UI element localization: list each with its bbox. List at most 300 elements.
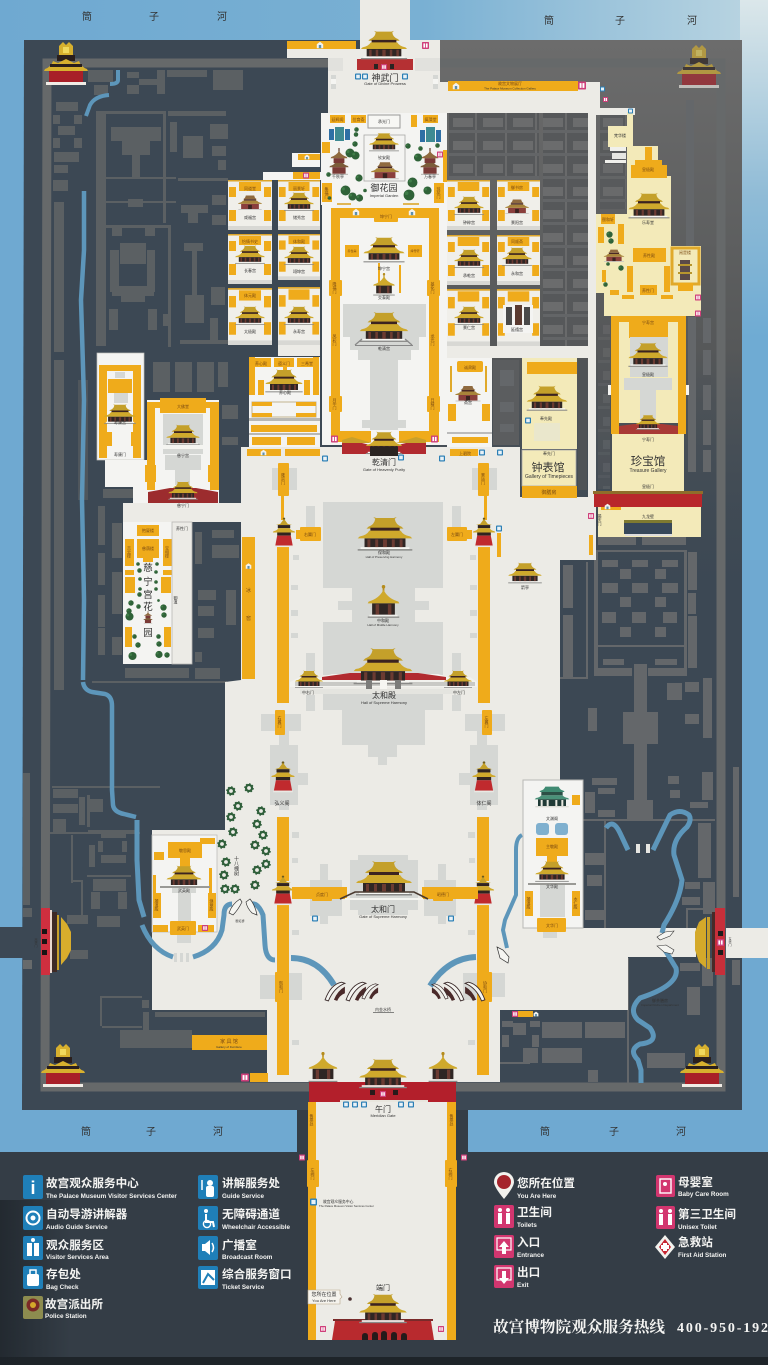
Ningshou yellow frame [611, 316, 619, 434]
panel: Imperial Garden: 集福门 [324, 186, 330, 200]
panel: Cining Palace: 大佛堂 [177, 403, 189, 409]
side halls: 弘德殿 [347, 310, 357, 315]
Hall of Central Harmony: 中和殿 [377, 617, 389, 623]
legend item: Police Station: 故宫派出所 [45, 1297, 103, 1311]
Qin'an Hall [369, 133, 399, 151]
Duanhong bridge: 断虹桥 [235, 918, 245, 923]
garden vertical title: 宫 [143, 589, 153, 601]
panel: Wenhua Hall: 文华殿 [546, 883, 558, 889]
cell: 永寿宫 [278, 287, 320, 345]
cell: 咸福宫: 咸福宫 [244, 214, 256, 220]
legend item: Broadcast Room [198, 1236, 273, 1261]
Hall of Joyful Longevity [628, 193, 670, 218]
legend item: Baby Care Room: Baby Care Room [678, 1191, 729, 1198]
legend panel background [0, 1110, 768, 1365]
panel: Hall of Mental Cultivation: 三希堂 [301, 360, 313, 366]
cell: 承乾宫: 承乾宫 [463, 272, 475, 278]
Corner corridors small hall [508, 563, 542, 590]
Gate of Supreme Harmony: 昭德门 [437, 891, 449, 897]
legend item: Ticket Service: Ticket Service [222, 1284, 265, 1291]
Golden Water River and bridges [142, 835, 522, 1013]
Huangji hall yellow: 皇极殿 [642, 166, 654, 172]
legend item: Unisex Toilet: 第三卫生间 [678, 1207, 736, 1221]
legend item: Unisex Toilet: Unisex Toilet [678, 1224, 718, 1231]
cell: 景阳宫 [497, 180, 540, 230]
East River and Donghua bridges [606, 812, 690, 1083]
panel: Treasure Gallery (Palace of Tranquil Longevity): 宁寿宫 [642, 319, 654, 325]
panel: Treasure Gallery (Palace of Tranquil Longevity): 皇极殿 [642, 371, 654, 377]
side doors: 右阙门 [448, 1167, 454, 1181]
court gate bars [247, 449, 503, 462]
Hall of Supreme Harmony: Hall of Supreme Harmony [361, 700, 407, 705]
garden title: 御花园 [370, 182, 398, 193]
Xianruo small pavilion [144, 611, 152, 624]
side doors [307, 1160, 457, 1187]
panel: Wuying Hall [152, 835, 217, 943]
legend item: Baby Care Room [656, 1175, 729, 1198]
east yellow corridor with doors: 协和门 [483, 980, 488, 994]
moat labels: 筒 [81, 1125, 91, 1138]
moat labels: 河 [213, 1126, 223, 1138]
Meridian Gate forecourt: 午门 [375, 1104, 391, 1114]
cell: 延禧宫: 延禧宫 [511, 326, 523, 332]
cell: 景仁宫 [447, 289, 490, 346]
west yellow corridor with doors: 隆宗门 [281, 472, 286, 486]
panel: Treasure Gallery (Palace of Tranquil Longevity): 养性门 [642, 287, 654, 293]
Corner corridors small hall: 箭亭 [521, 584, 529, 590]
panel: Ningshou garden: 养性门 [176, 525, 188, 531]
legend item: You Are Here: 您所在位置 [517, 1176, 575, 1190]
cell: 永和宫: 同顺斋 [511, 238, 523, 244]
You Are Here callout [308, 1290, 352, 1304]
west side path to Ningshou garden [123, 503, 243, 664]
cell: 永寿宫: 永寿宫 [293, 328, 305, 334]
panel: Wuying Hall: 武英门 [177, 925, 189, 931]
east and west inner doors: 龙光门 [430, 333, 436, 347]
main courtyard white plaza [152, 113, 696, 1082]
cell: 景阳宫: 御书房 [511, 184, 523, 190]
moat labels: 子 [609, 1126, 619, 1138]
Gate of Upright Conduct [332, 1294, 434, 1340]
grand north approach [287, 0, 600, 113]
east palace six courts [447, 180, 540, 346]
Gate of Heavenly Purity [342, 432, 426, 472]
Palace of Heavenly Purity [355, 312, 413, 351]
legend: fourth column [655, 1175, 736, 1259]
legend item: Entrance [494, 1235, 544, 1259]
East Glorious Gate: 东华门 [728, 936, 732, 947]
panel: Wenhua Hall: 主敬殿 [546, 843, 558, 849]
panel: Wuying Hall: 焕章殿 [210, 898, 214, 912]
Hall of Preserving Harmony: 保和殿 [378, 549, 390, 555]
legend item: Audio Guide: Audio Guide Service [46, 1224, 108, 1231]
panel: Wenhua Hall: 文华门 [546, 922, 558, 928]
side halls: 养性斋 [347, 248, 357, 253]
inner golden water bridges [325, 982, 485, 1001]
garden vertical title [143, 562, 153, 639]
legend item: Broadcast Room: 广播室 [222, 1238, 257, 1252]
legend item: Guide Service [198, 1175, 280, 1200]
moat labels: 子 [615, 15, 625, 27]
legend item: Police Station [23, 1296, 103, 1320]
You Are Here callout: You Are Here [312, 1298, 337, 1303]
Meridian Gate forecourt: Meridian Gate [370, 1113, 396, 1118]
legend item: Broadcast Room: Broadcast Room [222, 1254, 273, 1261]
legend item: Entrance: 入口 [517, 1236, 540, 1249]
side halls: 绛雪轩 [410, 248, 420, 253]
garden trees [326, 127, 440, 202]
cell: 永和宫 [497, 235, 540, 285]
cell: 景阳宫: 景阳宫 [511, 219, 523, 225]
cell: 储秀宫 [278, 180, 320, 230]
panel: Zhai Palace [447, 358, 492, 447]
east and west inner doors: 月华门 [332, 398, 338, 411]
legend item: Guide Service: Guide Service [222, 1193, 264, 1200]
Visitor service centre marker: The Palace Museum Visitor Services Center [319, 1204, 374, 1208]
red wall and Nine Dragon Screen: 九龙壁 [642, 513, 654, 519]
Hall of Central Harmony: Hall of Middle Harmony [367, 623, 399, 627]
cell: 咸福宫 [228, 180, 272, 230]
moat inland water courses: west side [81, 70, 144, 917]
legend item: Audio Guide [23, 1206, 128, 1231]
central terrace grey platforms [260, 468, 505, 1045]
red wall and Nine Dragon Screen: 锡庆门 [598, 513, 602, 527]
Ningshou gate [619, 415, 678, 434]
Gate of Supreme Harmony: 贞度门 [316, 891, 328, 897]
Duanhong bridge [229, 899, 257, 923]
panel: Hall of Mental Cultivation [249, 357, 320, 447]
east and west inner doors: 凤彩门 [332, 334, 338, 347]
Gate of Supreme Harmony [292, 861, 478, 922]
Meridian Gate forecourt: 端门 [376, 1283, 390, 1292]
panel: Gallery of Timepieces: 御膳房 [541, 489, 557, 496]
bathroom markers [331, 436, 438, 442]
moat labels: 筒 [544, 14, 554, 27]
cell: 钟粹宫 [447, 180, 490, 230]
panel: Treasure Gallery (Palace of Tranquil Longevity): 皇极门 [642, 483, 654, 489]
Gallery of Furniture: Gallery of Furniture [216, 1045, 242, 1049]
legend item: Audio Guide: 自动导游讲解器 [46, 1207, 128, 1221]
panel: Gallery of Timepieces: 奉先门 [543, 450, 555, 456]
legend item: Police Station: Police Station [45, 1313, 87, 1320]
panel: Treasure Gallery (Palace of Tranquil Longevity): 珍宝馆 [631, 454, 665, 468]
legend item: Exit: 出口 [517, 1265, 540, 1279]
hotline: 故宫博物院观众服务热线 [493, 1317, 665, 1336]
legend item: Wheelchair [198, 1206, 291, 1231]
small compound north-west of the inner court [263, 153, 321, 180]
legend item: Toilets: 卫生间 [517, 1205, 552, 1219]
Gate of Supreme Harmony: 太和门 [371, 904, 395, 914]
cell: 咸福宫: 同道堂 [244, 185, 256, 191]
north approach: yellow gallery and labels: The Palace Museum Collection Gallery [484, 86, 536, 90]
Gate of Divine Prowess: Gate of Divine Prowess [364, 81, 406, 86]
cell: 太极殿 [228, 288, 272, 345]
Changyin opera pavilion: 阅是楼 [679, 249, 691, 255]
east yellow corridor with doors [447, 463, 502, 1075]
East Glorious Gate [695, 908, 768, 975]
Palace of Heavenly Purity: 乾清宫 [378, 345, 390, 351]
east yellow corridor with doors: 左翼门 [451, 531, 463, 537]
panel: Imperial Garden: 承光门 [378, 118, 390, 124]
panel: Imperial Garden [321, 113, 447, 205]
three great halls [290, 517, 542, 705]
panel: Imperial Garden: 延辉阁 [332, 116, 344, 122]
Hall of Supreme Harmony [290, 648, 477, 705]
cell: 承乾宫 [447, 235, 490, 285]
cell: 永和宫: 永和宫 [511, 270, 523, 276]
panel: Imperial Garden: 琼苑门 [436, 186, 442, 200]
panel: Inner court frame: 交泰殿 [378, 294, 390, 300]
panel: Treasure Gallery (Palace of Tranquil Longevity): 乐寿堂 [642, 219, 654, 225]
panel: Treasure Gallery (Palace of Tranquil Longevity): 宁寿门 [642, 436, 654, 442]
north approach: yellow gallery and labels: 故宫文物展厅 [498, 80, 522, 86]
legend item: Toilets: Toilets [517, 1222, 537, 1229]
cell: 延禧宫 [497, 289, 540, 346]
panel: Wenhua Hall [523, 780, 583, 938]
cell: 太极殿: 体元殿 [244, 292, 256, 298]
panel: Imperial Garden: 钦安殿 [378, 154, 390, 160]
Huangji hall yellow [631, 147, 667, 178]
garden vertical title: 园 [143, 628, 153, 639]
legend item: First Aid Station: First Aid Station [678, 1252, 727, 1259]
panel: Ningshou garden [123, 522, 192, 664]
cell: 太极殿: 太极殿 [244, 328, 256, 334]
legend item: Entrance: Entrance [517, 1252, 544, 1259]
panel: Zhai Palace: 斋宫 [464, 399, 472, 405]
legend item: Visitor Services Center: i [30, 1178, 36, 1198]
east and west inner doors: 隆福门 [332, 281, 338, 295]
legend item: Guide Service: 讲解服务处 [222, 1176, 280, 1190]
garden vertical title: 宁 [143, 576, 153, 588]
legend: second column [198, 1175, 292, 1291]
garden vertical title: 花 [143, 601, 153, 613]
legend item: Unisex Toilet [656, 1206, 736, 1231]
west yellow corridor with doors [275, 463, 321, 1075]
panel: Shoukang Palace [97, 353, 147, 503]
east and west inner doors: 日精门 [430, 398, 436, 411]
legend item: Visitor Services Center: 故宫观众服务中心 [46, 1176, 139, 1190]
corner pavilions on corridors [271, 518, 496, 905]
pagoda Fanhua [605, 132, 626, 163]
Gate of Divine Prowess: 神武门 [371, 72, 399, 83]
Visitor service centre marker [310, 1198, 374, 1208]
legend item: Visitor Services Area: Visitor Services Area [46, 1254, 109, 1261]
cell: 翊坤宫: 体和殿 [293, 238, 305, 244]
Hall of Central Harmony [367, 585, 399, 627]
legend item: Wheelchair: 无障碍通道 [222, 1207, 280, 1221]
panel: Treasure Gallery (Palace of Tranquil Longevity): 养性殿 [643, 252, 655, 258]
small pavilions [329, 148, 440, 175]
Ice House yellow block: 窖 [246, 615, 251, 622]
panel: Imperial Garden: 万春亭 [424, 173, 436, 179]
panel: Inner court frame: 坤宁宫 [378, 265, 390, 271]
panel: Ningshou garden: 宝相楼 [165, 545, 170, 559]
moat labels [81, 10, 697, 1138]
side halls: 昭仁殿 [411, 310, 421, 315]
panel: Treasure Gallery (Palace of Tranquil Longevity) [596, 112, 701, 491]
Golden Water River and bridges: 内金水桥 [375, 1006, 391, 1012]
West Glorious Gate: 西华门 [34, 938, 38, 948]
Visitor service centre marker: 故宫观众服务中心 [323, 1199, 354, 1204]
Hall of Preserving Harmony: Hall of Preserving Harmony [366, 555, 403, 559]
lane south of east palaces [447, 346, 588, 358]
legend item: Ticket Service [198, 1266, 292, 1291]
panel: Hall of Mental Cultivation: 养心殿 [279, 389, 291, 395]
hotline: 400-950-192 [677, 1321, 768, 1336]
east and west inner doors [329, 280, 440, 412]
legend item: Toilets [494, 1205, 552, 1229]
cell: 长春宫 [228, 234, 272, 284]
moat labels: 河 [676, 1126, 686, 1138]
garden vertical title: 慈 [143, 562, 153, 574]
Kunning Palace [363, 237, 405, 262]
west palace compounds: dark building footprints [23, 70, 265, 1048]
west yellow corridor with doors: 右翼门 [278, 715, 282, 729]
legend: left column [23, 1175, 177, 1320]
panel: Gallery of Timepieces: 奉先殿 [540, 415, 552, 421]
panel: Wuying Hall: 凝道殿 [154, 898, 160, 912]
Hall of Supreme Harmony: 中右门 [302, 689, 314, 695]
panel: Imperial Garden: 摛藻堂 [424, 116, 436, 122]
Xishang small hall [602, 250, 624, 295]
panel: Imperial Garden: 位育斋 [352, 116, 364, 122]
moat labels: 子 [149, 11, 159, 23]
palace precinct dark ground [0, 40, 742, 1110]
panel: Zhai Palace: 诚肃殿 [464, 364, 476, 370]
cell: 翊坤宫 [278, 234, 320, 280]
Ice House yellow block [242, 537, 255, 679]
legend item: You Are Here: You Are Here [517, 1193, 557, 1200]
east yellow corridor with doors: 左翼门 [484, 715, 490, 729]
cell: 景仁宫: 景仁宫 [463, 324, 475, 330]
moat labels: 筒 [82, 10, 92, 23]
panel: Ningshou garden: 吉云楼 [127, 546, 132, 559]
panel: Ningshou garden: 抱厦楼 [142, 527, 154, 533]
panel: Gallery of Timepieces: 钟表馆 [532, 460, 564, 474]
panel: Treasure Gallery (Palace of Tranquil Longevity): Treasure Gallery [629, 468, 667, 474]
Cining gate: 慈宁门 [177, 502, 189, 508]
Gate of Supreme Harmony: Gate of Supreme Harmony [359, 914, 407, 919]
cell: 钟粹宫: 钟粹宫 [463, 219, 475, 225]
legend item: Wheelchair: Wheelchair Accessible [222, 1224, 291, 1231]
Meridian Gate forecourt: 售票处 [310, 1113, 314, 1127]
panel: Inner court frame: 坤宁门 [380, 213, 392, 219]
panel: Wenhua Hall: 文渊阁 [546, 815, 558, 821]
corner pavilions on corridors: 弘义阁 [274, 800, 290, 807]
panel: Wuying Hall: 敬思殿 [179, 847, 191, 853]
panel: Wuying Hall: 武英殿 [178, 887, 190, 893]
north-east link lane [596, 108, 635, 115]
panel: Imperial Garden: Imperial Garden [370, 193, 398, 198]
moat labels: 筒 [540, 1125, 550, 1138]
panel: Hall of Mental Cultivation: 养心殿 [255, 360, 267, 366]
Hall of Preserving Harmony [358, 517, 412, 559]
panel: Inner court frame [322, 205, 447, 472]
panel: Ningshou garden: 慈荫楼 [142, 545, 154, 551]
legend item: Exit: Exit [517, 1282, 529, 1289]
legend item: Bag Check: 存包处 [46, 1267, 81, 1281]
panel: Ningshou garden: 御道 [174, 595, 178, 605]
west yellow corridor with doors: 右翼门 [304, 531, 316, 537]
Tianyi Gate [371, 162, 399, 179]
cell: 翊坤宫: 翊坤宫 [293, 268, 305, 274]
legend item: Bag Check: Bag Check [46, 1284, 79, 1291]
Meridian Gate forecourt [299, 1052, 467, 1340]
Gate of Divine Prowess [355, 31, 413, 86]
east yellow corridor with doors: 景运门 [481, 472, 486, 486]
garden blue pavilions [329, 127, 441, 142]
moat labels: 河 [217, 11, 227, 23]
east and west inner doors: 基化门 [430, 281, 436, 295]
cell: 储秀宫: 丽景轩 [293, 185, 305, 191]
panel: Shoukang Palace: 寿康门 [114, 451, 126, 457]
corner towers [41, 42, 724, 1087]
panel: Hall of Mental Cultivation: 遵义门 [278, 360, 290, 366]
court gate bars: 上驷院 [459, 450, 471, 456]
Gallery of Furniture [192, 1011, 538, 1082]
panel: Gallery of Timepieces [522, 358, 577, 498]
panel: Wenhua Hall: 本仁殿 [574, 896, 578, 910]
hotline [493, 1317, 768, 1336]
Yihe side court: 颐和轩 [602, 216, 614, 222]
Eighteen Locust Trees: 十八槐树 [233, 855, 239, 877]
west yellow corridor with doors: 熙和门 [279, 981, 284, 994]
pagoda Fanhua: 梵华楼 [614, 132, 626, 138]
legend item: Visitor Services Area [23, 1236, 109, 1261]
legend item: Exit [494, 1265, 540, 1289]
east palace compounds: dark building footprints [449, 100, 740, 1083]
Hall of Supreme Harmony: 中左门 [453, 689, 465, 695]
panel: Cining Palace [145, 398, 219, 508]
cell: 长春宫: 怡情书史 [242, 238, 258, 244]
cell: 长春宫: 长春宫 [244, 267, 256, 273]
moat labels: 子 [146, 1126, 156, 1138]
legend item: First Aid Station [655, 1235, 727, 1259]
panel: Shoukang Palace: 寿康宫 [114, 419, 126, 425]
Meridian Gate forecourt: 售票处 [450, 1113, 454, 1127]
legend item: First Aid Station: 急救站 [678, 1235, 713, 1249]
west palace six courts [228, 180, 320, 356]
legend: third column [494, 1172, 575, 1289]
Gallery of Furniture: 家 具 馆 [220, 1038, 238, 1045]
legend item: You Are Here [494, 1172, 575, 1200]
panel: Imperial Garden: 千秋亭 [332, 173, 344, 179]
Changyin opera pavilion [672, 248, 699, 291]
side doors: 左阙门 [310, 1167, 316, 1181]
You Are Here callout: 您所在位置 [311, 1291, 337, 1298]
panel: Wenhua Hall: 凝道殿 [526, 896, 532, 910]
East River and Donghua bridges: 御茶膳房 [652, 997, 668, 1003]
East River and Donghua bridges: Imperial Kitchen Department [641, 1003, 679, 1007]
cell: 储秀宫: 储秀宫 [293, 214, 305, 220]
Gate of Heavenly Purity: Gate of Heavenly Purity [363, 467, 405, 472]
panel: Gallery of Timepieces: Gallery of Timepieces [525, 474, 574, 480]
panel: Cining Palace: 慈宁宫 [177, 452, 189, 458]
Hall of Supreme Harmony: 太和殿 [372, 690, 396, 700]
garden trees [125, 562, 170, 660]
moat labels: 河 [687, 15, 697, 27]
legend item: Ticket Service: 综合服务窗口 [222, 1267, 292, 1281]
north approach: yellow gallery and labels [287, 41, 633, 114]
side halls [345, 245, 423, 318]
legend item: Visitor Services Area: 观众服务区 [46, 1238, 104, 1252]
Eighteen Locust Trees [218, 784, 270, 893]
West Glorious Gate [23, 908, 71, 975]
corner pavilions on corridors: 体仁阁 [476, 800, 492, 807]
legend item: Bag Check [23, 1266, 81, 1291]
legend item: Visitor Services Center: The Palace Museum Visitor Services Center [46, 1193, 177, 1200]
Yihe side court [598, 214, 624, 244]
